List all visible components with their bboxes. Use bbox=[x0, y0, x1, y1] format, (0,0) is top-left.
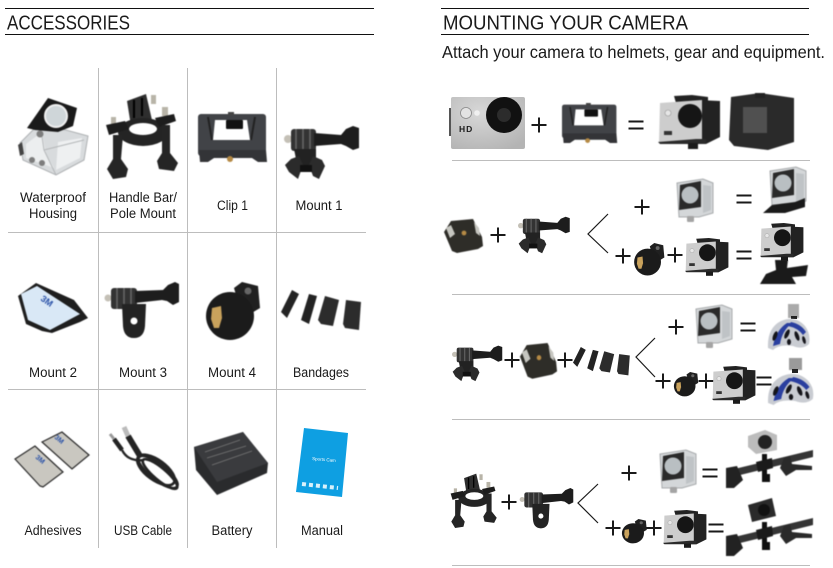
arrow: branch bbox=[578, 484, 598, 523]
mounting row 3: helmet mount bbox=[452, 304, 813, 405]
panel: adhesives bbox=[15, 432, 89, 538]
icon: camera in clip bbox=[685, 238, 728, 276]
panel: mount 3 bbox=[104, 282, 179, 380]
section heading: mounting your camera bbox=[441, 8, 809, 34]
mounting row 4: handle bar mount bbox=[451, 430, 813, 556]
icon: housing bbox=[696, 305, 732, 348]
panel: handle bar mount: Pole Mount bbox=[110, 206, 176, 221]
equals sign bbox=[756, 378, 772, 384]
icon: mount 3 bbox=[520, 488, 573, 528]
panel: usb cable: USB Cable bbox=[114, 523, 172, 538]
icon: helmet with camera bbox=[768, 358, 813, 405]
section heading: accessories: ACCESSORIES bbox=[7, 12, 130, 34]
accessories grid lines bbox=[8, 68, 366, 548]
icon: clip back view bbox=[729, 93, 794, 150]
section heading: mounting your camera: MOUNTING YOUR CAMERA bbox=[443, 12, 688, 34]
equals sign bbox=[740, 324, 756, 330]
plus sign bbox=[668, 320, 684, 334]
icon: camera in clip bbox=[658, 95, 720, 149]
icon: battery bbox=[194, 432, 268, 495]
plus sign bbox=[616, 248, 630, 264]
icon: bike bar with camera bbox=[726, 498, 813, 556]
icon: camera in clip bbox=[712, 366, 755, 404]
icon: camera front bbox=[449, 97, 525, 149]
plus sign bbox=[502, 494, 516, 510]
icon: adhesive pads bbox=[15, 432, 89, 487]
panel: waterproof housing: Housing bbox=[29, 206, 77, 221]
equals sign bbox=[736, 196, 752, 202]
icon: bandages bbox=[281, 290, 361, 330]
icon: flat mount bbox=[520, 343, 557, 379]
panel: handle bar mount: Handle Bar/ bbox=[109, 190, 177, 205]
panel: bandages: Bandages bbox=[293, 365, 349, 380]
panel: mount 3: Mount 3 bbox=[119, 365, 167, 380]
panel: handle bar mount bbox=[106, 94, 178, 221]
icon: waterproof housing bbox=[18, 98, 88, 175]
icon: housing bbox=[660, 450, 696, 493]
icon: camera on mount bbox=[760, 223, 808, 284]
icon: housing bbox=[677, 179, 713, 222]
plus sign bbox=[634, 200, 650, 214]
panel: mount 2 bbox=[18, 283, 88, 380]
mounting row 2: flat mount plus mount 1 bbox=[444, 167, 808, 284]
equals sign bbox=[708, 524, 724, 532]
panel: battery bbox=[194, 432, 268, 538]
icon: mount 4 bbox=[206, 282, 260, 340]
panel: waterproof housing bbox=[18, 98, 88, 221]
icon: mount 4 bbox=[674, 372, 698, 396]
panel: mount 1 bbox=[284, 126, 359, 213]
panel: mount 2: Mount 2 bbox=[29, 365, 77, 380]
plus sign bbox=[656, 374, 670, 388]
icon: mount 1 bbox=[284, 126, 359, 179]
icon: mount 3 bbox=[104, 282, 179, 338]
panel: manual: Manual bbox=[301, 523, 343, 538]
icon: handle bar mount bbox=[106, 94, 178, 179]
icon: handle bar mount bbox=[451, 474, 497, 528]
panel: battery: Battery bbox=[212, 523, 253, 538]
icon: helmet with housing bbox=[768, 304, 810, 350]
arrow: branch bbox=[588, 214, 608, 253]
panel: clip 1: Clip 1 bbox=[217, 198, 248, 213]
panel: mount 4: Mount 4 bbox=[208, 365, 256, 380]
equals sign bbox=[702, 470, 718, 476]
section heading: accessories bbox=[5, 8, 374, 34]
mounting row 1: camera plus clip bbox=[449, 93, 794, 150]
panel: waterproof housing: Waterproof bbox=[20, 190, 86, 205]
panel: bandages bbox=[281, 290, 361, 380]
icon: camera in clip bbox=[663, 510, 706, 548]
icon: clip bbox=[562, 103, 617, 143]
icon: flat mount bbox=[444, 219, 483, 253]
icon: mount 4 bbox=[634, 243, 664, 275]
plus sign bbox=[698, 374, 714, 388]
panel: manual bbox=[296, 428, 348, 538]
plus sign bbox=[646, 520, 662, 536]
icon: mount 1 bbox=[452, 346, 502, 381]
icon: adhesive pads: 3M bbox=[34, 454, 46, 466]
equals sign bbox=[628, 122, 644, 128]
plus sign bbox=[532, 118, 546, 132]
plus sign bbox=[504, 352, 520, 368]
equals sign bbox=[736, 252, 752, 258]
plus sign bbox=[606, 520, 620, 536]
icon: bike bar with housing bbox=[726, 430, 813, 488]
row dividers bbox=[452, 160, 810, 566]
plus sign bbox=[668, 248, 682, 262]
panel: mount 1: Mount 1 bbox=[296, 198, 342, 213]
icon: mount 2: 3M bbox=[39, 293, 55, 309]
plus sign bbox=[558, 352, 572, 368]
panel: adhesives: Adhesives bbox=[24, 523, 82, 538]
icon: manual booklet: Sports Cam bbox=[312, 456, 336, 463]
icon: bandages bbox=[573, 347, 630, 375]
panel: clip 1 bbox=[198, 112, 267, 213]
icon: adhesive pads: 3M bbox=[53, 434, 65, 446]
panel: usb cable bbox=[110, 427, 182, 538]
icon: mount 4 bbox=[622, 519, 647, 543]
icon: housing on mount bbox=[763, 167, 806, 213]
panel: mount 4 bbox=[206, 282, 260, 380]
icon: camera front: HD bbox=[459, 124, 473, 134]
plus sign bbox=[622, 466, 636, 480]
icon: clip frame bbox=[198, 112, 267, 162]
icon: mount 1 bbox=[518, 217, 570, 253]
arrow: branch bbox=[636, 338, 655, 377]
plus sign bbox=[490, 228, 506, 242]
icon: usb cable bbox=[110, 427, 182, 493]
